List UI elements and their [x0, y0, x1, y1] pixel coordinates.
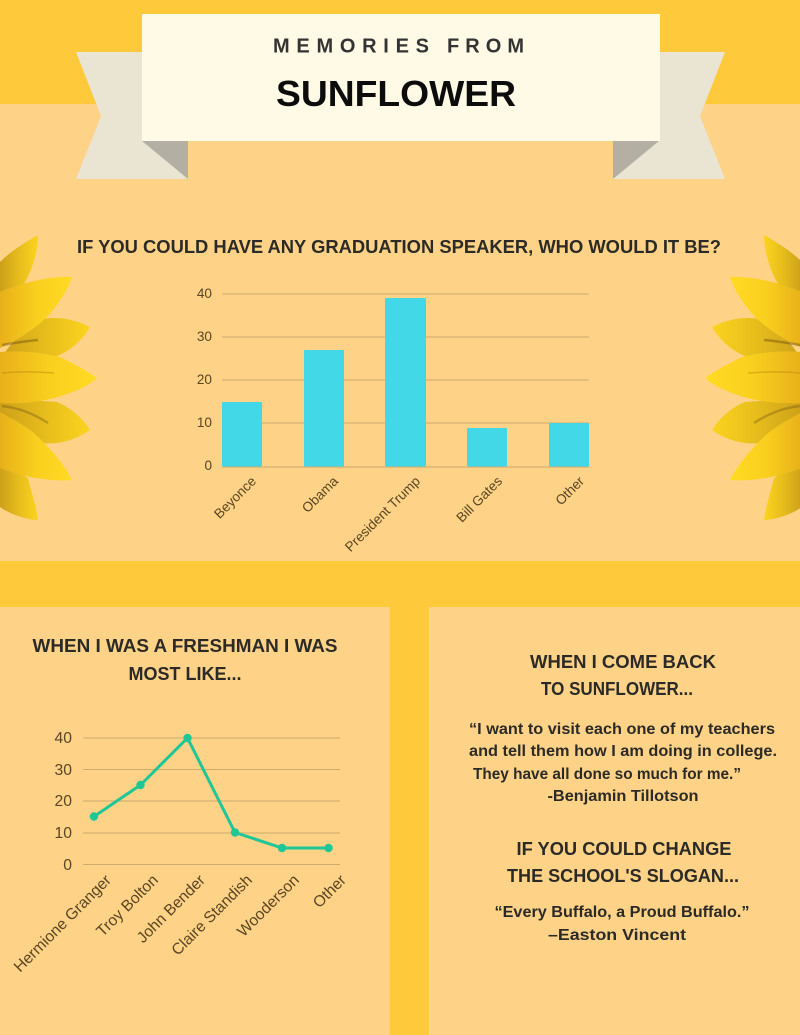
quote: Easton Vincent — [494, 904, 750, 944]
x axis labels: Beyonce — [211, 474, 259, 522]
heading: slogan: IF YOU COULD CHANGE — [516, 838, 732, 859]
top yellow band — [0, 0, 800, 104]
quote: Benjamin Tillotson: -Benjamin Tillotson — [548, 788, 698, 805]
heading: slogan — [507, 838, 739, 886]
y axis labels: 20 — [197, 372, 212, 387]
quote: Benjamin Tillotson: They have all done so much for me.” — [473, 766, 741, 783]
x axis labels: Other — [552, 473, 587, 508]
ribbon front panel — [142, 14, 660, 141]
y axis labels: 10 — [197, 415, 212, 430]
quote: Benjamin Tillotson — [469, 721, 777, 805]
y axis labels — [197, 286, 212, 473]
x axis labels: Obama — [299, 473, 341, 516]
lower horizontal band — [0, 561, 800, 607]
quote: Benjamin Tillotson: and tell them how I am doing in college. — [469, 743, 777, 760]
quote: Benjamin Tillotson: “I want to visit each one of my teachers — [469, 721, 775, 738]
banner title ribbon — [76, 14, 725, 179]
ribbon right tail — [613, 52, 725, 179]
y axis labels: 30 — [197, 329, 212, 344]
heading: come back — [530, 651, 717, 699]
x axis labels: Bill Gates — [453, 473, 505, 525]
y axis labels: 20 — [55, 793, 72, 810]
x axis labels: John Bender — [134, 872, 209, 947]
sunflower left — [0, 235, 97, 520]
x axis labels: Claire Standish — [169, 872, 256, 959]
title line two: SUNFLOWER — [276, 73, 516, 114]
ribbon right fold — [613, 141, 659, 179]
y axis labels: 0 — [63, 857, 72, 874]
heading: freshman: WHEN I WAS A FRESHMAN I WAS — [32, 635, 338, 656]
data line — [94, 738, 328, 848]
line chart: freshman — [11, 730, 350, 976]
heading: slogan: THE SCHOOL'S SLOGAN... — [507, 865, 739, 886]
y axis labels: 0 — [204, 458, 212, 473]
y axis labels: 10 — [55, 825, 72, 842]
x axis labels — [211, 473, 587, 555]
bar chart: graduation speaker — [197, 286, 589, 555]
x axis labels: Wooderson — [234, 872, 303, 940]
ribbon left fold — [142, 141, 188, 179]
y axis labels: 30 — [55, 762, 72, 779]
quote: Easton Vincent: “Every Buffalo, a Proud Buffalo.” — [494, 904, 750, 921]
bars — [222, 298, 589, 466]
x axis labels — [11, 872, 350, 976]
x axis labels: Troy Bolton — [93, 872, 162, 940]
title line one: MEMORIES — [273, 36, 429, 58]
heading: graduation speaker: IF YOU COULD HAVE ANY GRADUATION SPEAKER, WHO WOULD IT BE? — [77, 236, 721, 257]
title line one: FROM — [447, 36, 524, 58]
y axis labels — [55, 730, 72, 874]
x axis labels: Other — [310, 872, 350, 912]
heading: come back: TO SUNFLOWER... — [541, 678, 693, 699]
quote: Easton Vincent: –Easton Vincent — [548, 927, 687, 944]
y axis labels: 40 — [197, 286, 212, 301]
heading: freshman — [32, 635, 338, 684]
x axis labels: Hermione Granger — [11, 872, 115, 976]
x axis labels: President Trump — [342, 474, 423, 555]
y axis labels: 40 — [55, 730, 72, 747]
sunflower right — [705, 235, 800, 520]
heading: freshman: MOST LIKE... — [128, 663, 242, 684]
ribbon left tail — [76, 52, 188, 179]
heading: come back: WHEN I COME BACK — [530, 651, 717, 672]
lower vertical band — [390, 607, 429, 1035]
data points — [90, 734, 333, 852]
